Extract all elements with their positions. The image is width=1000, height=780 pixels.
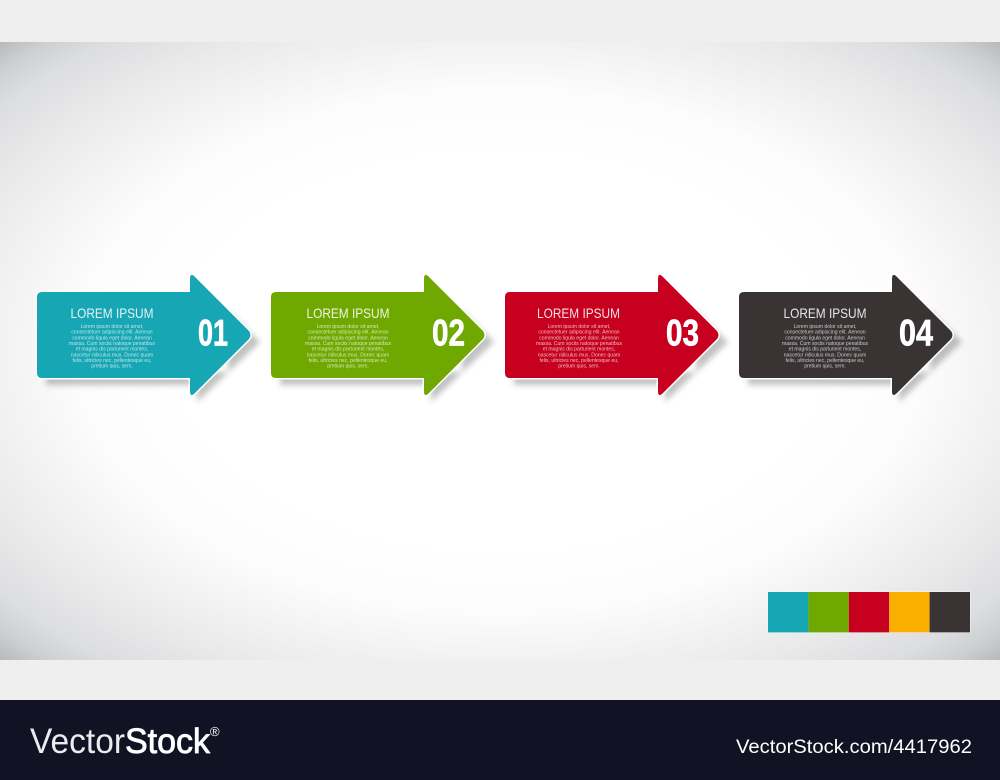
arrow 2 heading: LOREM IPSUM	[306, 306, 390, 321]
arrow 3 text: Lorem ipsum dolor sit amet,	[548, 324, 610, 330]
arrow 4 heading: LOREM IPSUM	[784, 306, 866, 321]
footer url: VectorStock.com/4417962	[736, 736, 972, 758]
top strip	[0, 0, 1000, 42]
arrow 3 text: consectetuer adipiscing elit. Aenean	[538, 330, 620, 336]
arrow 3 text: et magnis dis parturient montes,	[543, 347, 615, 353]
arrow 3	[505, 275, 728, 402]
arrow 3 text	[536, 324, 622, 370]
arrow 4 text: Lorem ipsum dolor sit amet,	[794, 324, 856, 330]
arrow 1 body	[37, 275, 250, 395]
arrow 4 text: commodo ligula eget dolor. Aenean	[785, 335, 865, 341]
arrow 3 text: massa. Cum sociis natoque penatibus	[536, 341, 622, 347]
arrow 2 text: Lorem ipsum dolor sit amet,	[317, 324, 379, 330]
arrow 2 number: 02	[432, 312, 465, 354]
arrow 1 text: nascetur ridiculus mus. Donec quam	[71, 352, 153, 358]
arrow 1 text: commodo ligula eget dolor. Aenean	[72, 335, 152, 341]
arrow 3 shadow	[514, 310, 728, 402]
arrow 1 text: felis, ultricies nec, pellentesque eu,	[72, 358, 152, 364]
arrow 1 text: Lorem ipsum dolor sit amet,	[81, 324, 143, 330]
arrow 4 number: 04	[899, 312, 933, 354]
arrow 4 text: felis, ultricies nec, pellentesque eu,	[786, 358, 864, 364]
arrow 2 text: felis, ultricies nec, pellentesque eu,	[308, 358, 388, 364]
arrow 2 text	[305, 324, 391, 370]
arrow 3 body	[505, 275, 718, 395]
arrow 1 text: massa. Cum sociis natoque penatibus	[69, 341, 155, 347]
arrow 4 text	[782, 324, 868, 370]
arrow 1 text: et magnis dis parturient montes,	[76, 347, 148, 353]
arrow 4 shadow	[748, 310, 962, 402]
arrow 3 heading: LOREM IPSUM	[537, 306, 620, 321]
arrow 1 shadow	[46, 310, 260, 402]
arrow 2	[271, 275, 494, 402]
footer logo: Vector	[30, 722, 125, 761]
arrow 2 text: massa. Cum sociis natoque penatibus	[305, 341, 391, 347]
arrow 2 text: consectetuer adipiscing elit. Aenean	[307, 330, 389, 336]
arrow 3 text: commodo ligula eget dolor. Aenean	[539, 335, 619, 341]
arrow 3 text: pretium quis, sem.	[558, 364, 600, 370]
arrow 3 text: felis, ultricies nec, pellentesque eu,	[540, 358, 618, 364]
arrow 1 text: pretium quis, sem.	[91, 364, 133, 370]
arrow 1 heading: LOREM IPSUM	[70, 306, 154, 321]
lower strip	[0, 660, 1000, 700]
colour palette swatches	[768, 592, 970, 633]
footer bar	[0, 700, 1000, 780]
registered mark: ®	[210, 724, 220, 739]
arrow 3 number: 03	[666, 312, 699, 354]
arrow 4 text: nascetur ridiculus mus. Donec quam	[784, 352, 866, 358]
arrow 4 text: pretium quis, sem.	[804, 364, 846, 370]
footer logo	[30, 722, 210, 761]
arrow 4	[739, 275, 962, 402]
arrow 2 text: nascetur ridiculus mus. Donec quam	[307, 352, 389, 358]
arrow 4 body	[739, 275, 952, 395]
arrow 2 text: commodo ligula eget dolor. Aenean	[308, 335, 388, 341]
arrow 2 body	[271, 275, 484, 395]
arrow 2 text: pretium quis, sem.	[327, 364, 369, 370]
arrow 1 text: consectetuer adipiscing elit. Aenean	[71, 330, 153, 336]
arrow 4 text: et magnis dis parturient montes,	[789, 347, 861, 353]
arrow 1 text	[69, 324, 155, 370]
background panel	[0, 42, 1000, 660]
arrow 2 shadow	[280, 310, 494, 402]
arrow 4 text: consectetuer adipiscing elit. Aenean	[784, 330, 866, 336]
footer logo: Stock	[125, 722, 210, 761]
arrow 3 text: nascetur ridiculus mus. Donec quam	[538, 352, 620, 358]
arrow 2 text: et magnis dis parturient montes,	[312, 347, 384, 353]
arrow 1 number: 01	[198, 312, 228, 354]
arrow 4 text: massa. Cum sociis natoque penatibus	[782, 341, 868, 347]
arrow 1	[37, 275, 260, 402]
